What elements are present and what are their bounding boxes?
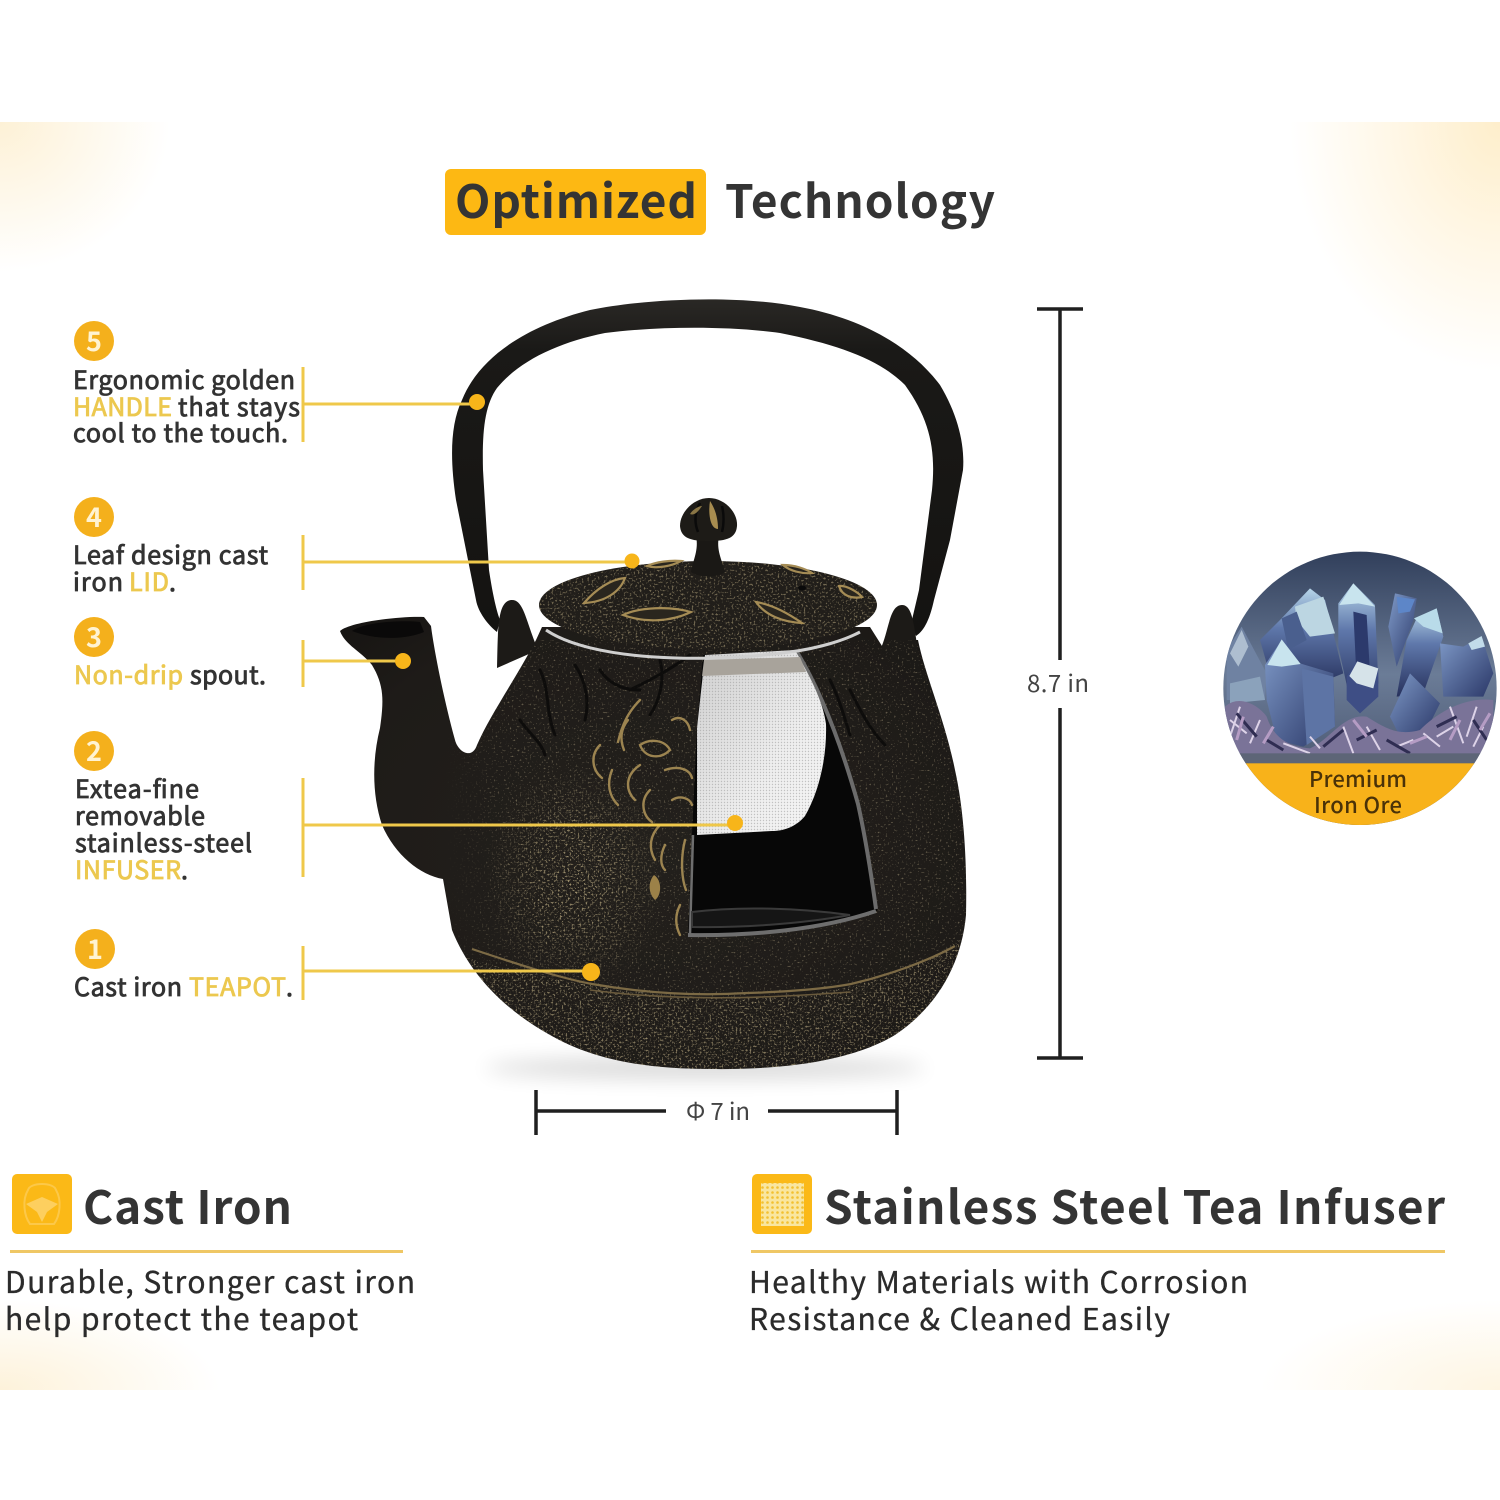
number badge 3: 3 [86,616,102,655]
callout 1 text: TEAPOT [189,968,286,1004]
feature description: Durable, Stronger cast iron [5,1258,415,1302]
callout 4 leader [303,535,640,590]
dimension: diameter 7 in: Φ 7 in [686,1092,750,1127]
teapot lid [535,498,885,655]
callout 1 leader [303,946,600,1000]
feature description: Resistance & Cleaned Easily [749,1295,1170,1339]
title: Technology [725,166,995,232]
feature: stainless steel tea infuser [749,1172,1446,1339]
teapot handle [452,299,963,636]
callout 5 text: cool to the touch. [73,414,288,450]
callout 2 text: INFUSER [75,851,181,887]
callout 3: spout [74,616,411,692]
number badge 1: 1 [87,928,103,967]
icon: mesh [752,1174,812,1234]
right lug [880,605,922,675]
badge label: Iron Ore [1314,788,1402,820]
callout 2 text: Extea-fine [75,770,199,806]
gold speckle texture [440,640,980,1080]
feature: cast iron [5,1172,415,1339]
title: Optimized [455,166,697,232]
number badge 5: 5 [86,320,102,359]
badge: premium iron ore [1220,550,1500,830]
callout 5: handle [73,320,485,450]
callout 2: infuser [74,730,743,887]
callout 4 text: LID [129,563,169,599]
cutaway window [688,650,877,935]
teapot body [340,600,980,1080]
back crystals [1227,627,1267,700]
band line [472,946,955,994]
left lug [497,600,538,668]
callout 5 leader [303,367,485,442]
dimension: height 8.7 in [1027,309,1089,1058]
dimension: height 8.7 in: 8.7 in [1027,664,1089,699]
badge label: Premium [1309,762,1407,794]
divider [751,1250,1445,1253]
number badge 1 [75,928,115,969]
purple rubble [1225,700,1493,755]
number badge 3 [74,616,114,657]
number badge 5 [74,320,114,361]
feature description: Healthy Materials with Corrosion [749,1258,1248,1302]
callout 4 text: iron [73,563,123,599]
callout 2 text: stainless-steel [75,824,252,860]
number badge 4 [74,496,114,537]
feature description: help protect the teapot [5,1295,358,1339]
callout 5 text: that stays [178,388,300,424]
stainless steel infuser [697,650,826,835]
callout 1: teapot [74,928,600,1004]
callout 2 leader [303,778,743,877]
feature heading: Stainless Steel Tea Infuser [824,1172,1446,1238]
callout 4: lid [73,496,640,599]
callout 2 text: removable [75,797,205,833]
lid leaves [584,561,862,623]
callout 1 text: Cast iron [74,968,182,1004]
number badge 4: 4 [86,496,102,535]
icon: cast iron kettle [12,1174,72,1234]
callout 2 text: . [181,851,188,887]
callout 3 leader [303,640,411,687]
dimension: diameter 7 in [536,1090,897,1135]
callout 3 text: spout. [190,656,266,692]
callout 3 text: Non-drip [74,656,183,692]
inner ledge [692,908,850,927]
callout 5 text: Ergonomic golden [73,361,295,397]
number badge 2: 2 [86,730,102,769]
spout opening [352,621,424,638]
callout 5 text: HANDLE [73,388,172,424]
yellow footer strip [1246,763,1474,825]
silver rim under lid [546,630,860,658]
callout 4 text: Leaf design cast [73,536,269,572]
teapot shadow [485,1058,925,1078]
divider [10,1250,403,1253]
embossed leaf pattern [593,700,692,935]
callout 4 text: . [169,563,176,599]
teapot illustration [340,299,980,1080]
lid knob [680,498,737,576]
feature heading: Cast Iron [83,1172,292,1238]
callout 1 text: . [286,968,293,1004]
front crystals [1265,640,1335,747]
gold leaf accent [650,875,660,900]
crystal picture [1220,550,1500,830]
number badge 2 [74,730,114,771]
title [445,166,995,235]
